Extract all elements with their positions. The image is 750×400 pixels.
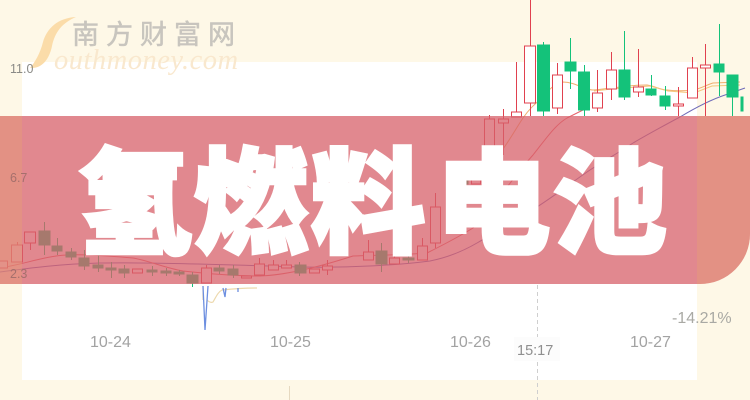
- moving average lines: [0, 82, 745, 276]
- logo chinese name: 南方财富网: [72, 13, 242, 52]
- date label 10-25: 10-25: [270, 334, 311, 351]
- title: 氢燃料电池: [78, 112, 667, 277]
- band right tint: [697, 116, 750, 284]
- blue spike: [203, 286, 238, 330]
- logo: southmoney: [30, 13, 242, 76]
- candlesticks: falling: [39, 24, 743, 287]
- purple moving average: [0, 88, 745, 272]
- y axis label 11.0: 11.0: [10, 62, 33, 76]
- date label 10-27: 10-27: [630, 334, 671, 351]
- banner band: [0, 116, 750, 284]
- volume spike traces under the band: [203, 286, 257, 330]
- white chart panel: [22, 62, 697, 380]
- time label: 15:17: [517, 343, 553, 359]
- y axis label 6.7: 6.7: [10, 171, 27, 185]
- bottom tick: [288, 386, 290, 400]
- crosshair dashed line: [536, 285, 538, 400]
- time label: [514, 337, 560, 361]
- date label 10-24: 10-24: [90, 334, 131, 351]
- yellow moving average: [594, 85, 740, 93]
- percent change label: -14.21%: [672, 310, 732, 327]
- logo swoosh: [30, 17, 76, 68]
- tan trace: [203, 286, 257, 302]
- candlesticks: rising: [0, 0, 710, 283]
- orange moving average: [500, 82, 740, 153]
- logo latin name: outhmoney.com: [54, 45, 239, 76]
- band left tint: [0, 116, 22, 284]
- y axis label 2.3: 2.3: [10, 267, 27, 281]
- date label 10-26: 10-26: [450, 334, 491, 351]
- red moving average: [0, 110, 583, 276]
